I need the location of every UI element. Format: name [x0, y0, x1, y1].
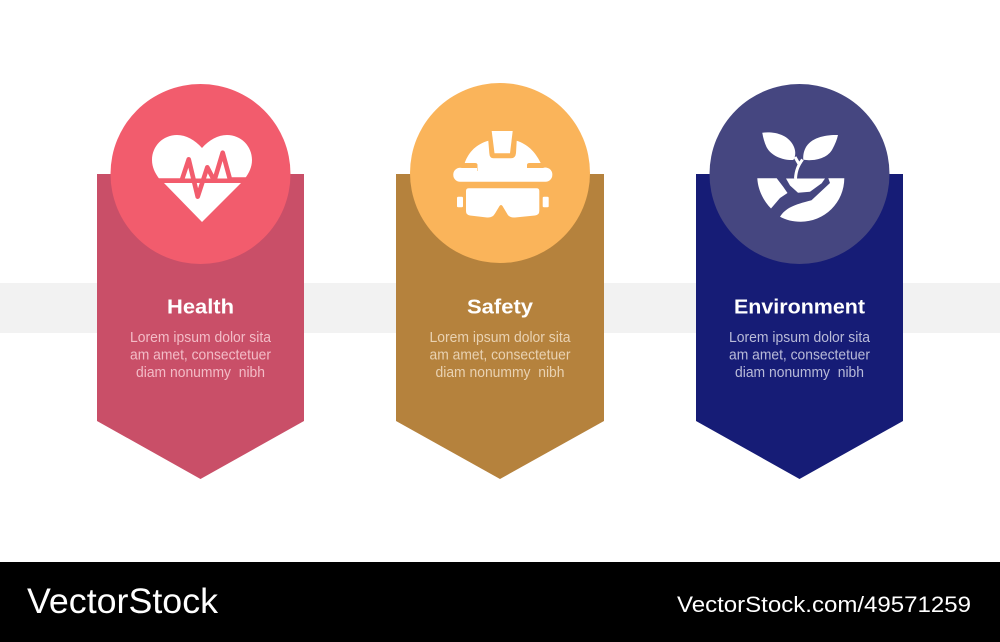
panel: safety — [396, 83, 604, 479]
environment description: am amet, consectetuer — [729, 348, 870, 364]
health description: Lorem ipsum dolor sita — [130, 330, 272, 346]
environment description — [729, 330, 871, 381]
footer image reference: VectorStock.com/49571259 — [677, 592, 971, 617]
health description: am amet, consectetuer — [130, 348, 271, 364]
safety banner — [396, 174, 604, 479]
icon: plant in hand — [757, 132, 844, 222]
safety circle — [410, 83, 590, 263]
safety description: diam nonummy nibh — [436, 365, 564, 381]
health circle — [110, 84, 290, 264]
health heading: Health — [167, 296, 234, 318]
environment circle — [710, 84, 890, 264]
panel: health — [97, 84, 304, 479]
health description — [130, 330, 272, 381]
safety description: am amet, consectetuer — [430, 348, 571, 364]
safety description — [430, 330, 571, 381]
health banner — [97, 174, 304, 479]
safety heading: Safety — [467, 296, 534, 318]
health description: diam nonummy nibh — [136, 365, 265, 381]
panel: environment — [696, 84, 903, 479]
environment banner — [696, 174, 903, 479]
safety description: Lorem ipsum dolor sita — [430, 330, 571, 346]
footer bar — [0, 562, 1000, 642]
horizontal background band — [0, 283, 1000, 333]
environment description: Lorem ipsum dolor sita — [729, 330, 871, 346]
environment description: diam nonummy nibh — [735, 365, 864, 381]
icon: heart with pulse — [152, 135, 252, 222]
footer logo wordmark: VectorStock — [27, 582, 219, 621]
environment heading: Environment — [734, 296, 865, 318]
icon: hard hat and goggles — [453, 131, 552, 218]
